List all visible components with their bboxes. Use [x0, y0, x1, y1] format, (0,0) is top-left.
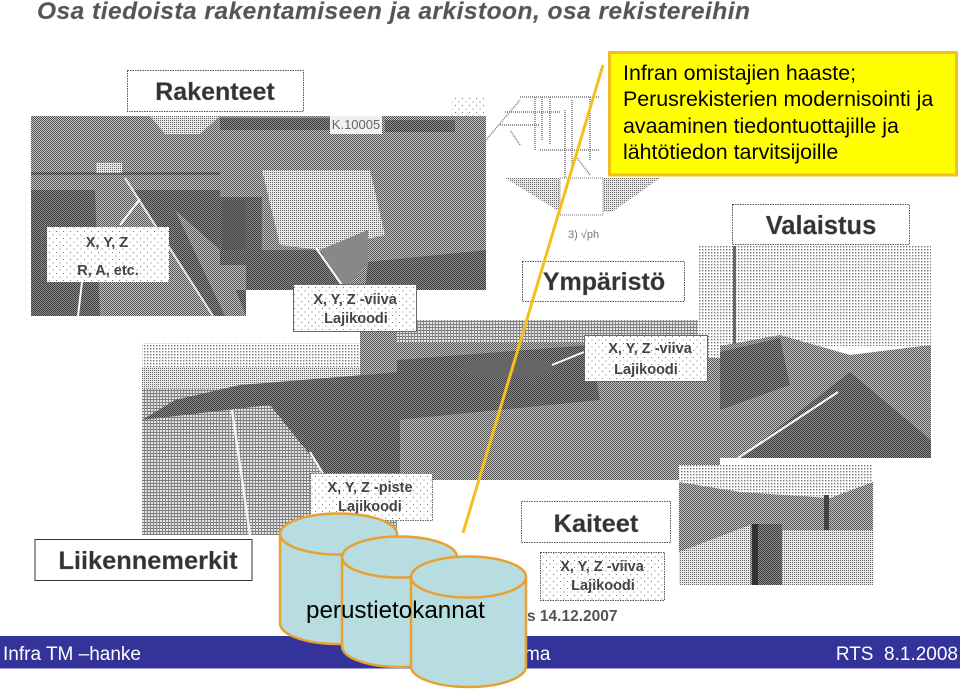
label: X, Y, Z-piste Lajikoodi	[310, 474, 432, 520]
database label: perustietokannat	[306, 597, 485, 624]
footer bar: Infra TM –hanke	[3, 644, 141, 665]
label: X, Y, Z-viiva Lajikoodi environment: X, Y, Z -viiva	[608, 341, 693, 357]
footer bar	[0, 636, 960, 668]
label: Rakenteet: Rakenteet	[155, 78, 275, 106]
label: X, Y, Z-viiva Lajikoodi	[294, 284, 416, 332]
callout: Perusrekisterien modernisointi ja	[623, 87, 933, 111]
label: X, Y, Z-viiva Lajikoodi environment	[584, 336, 708, 382]
callout	[610, 52, 956, 175]
label: X, Y, Z-viiva Lajikoodi guardrail	[540, 552, 664, 600]
callout: Infran omistajien haaste;	[623, 61, 856, 85]
connector line	[463, 65, 603, 533]
label: X, Y, Z-viiva Lajikoodi environment: Lajikoodi	[614, 362, 678, 378]
label: Rakenteet	[128, 70, 304, 112]
database cylinder 2	[342, 536, 457, 667]
photo: guardrail	[679, 465, 873, 585]
database cylinder 3	[411, 556, 526, 687]
label: X, Y, Z-viiva Lajikoodi: Lajikoodi	[324, 311, 388, 327]
drawing: road cross-section: 3) √ph	[568, 229, 599, 241]
label: X, Y, Z-viiva Lajikoodi guardrail: X, Y, Z -viiva	[560, 559, 645, 575]
label: Liikennemerkit	[35, 540, 252, 580]
database cylinder 1	[280, 514, 397, 644]
label: Valaistus	[732, 204, 910, 244]
photo: bridge structure: K.10005	[332, 117, 380, 132]
label: X, Y, Z-viiva Lajikoodi guardrail: Lajikoodi	[571, 578, 635, 594]
photo: roundabout	[142, 320, 720, 535]
photo: lit motorway	[698, 246, 931, 458]
callout: avaaminen tiedontuottajille ja	[623, 114, 899, 138]
label: X, Y, Z-piste Lajikoodi: Lajikoodi	[338, 499, 402, 515]
label: Ympäristö: Ympäristö	[543, 268, 665, 296]
label: X, Y, Z R, A, etc.: X, Y, Z	[86, 235, 128, 251]
footer bar: ma	[524, 644, 551, 665]
label: X, Y, Z R, A, etc.	[47, 227, 169, 282]
photo: structures road	[31, 116, 246, 316]
label: Kaiteet: Kaiteet	[554, 510, 639, 538]
label: X, Y, Z R, A, etc.: R, A, etc.	[77, 263, 139, 279]
label: Ympäristö	[522, 262, 684, 302]
label: Liikennemerkit: Liikennemerkit	[58, 547, 238, 575]
label: X, Y, Z-viiva Lajikoodi: X, Y, Z -viiva	[313, 292, 398, 308]
label: Kaiteet	[522, 502, 670, 542]
source date: s 14.12.2007	[527, 608, 618, 625]
footer bar: RTS 8.1.2008	[836, 644, 958, 665]
drawing: road cross-section	[452, 96, 660, 241]
label: Valaistus: Valaistus	[766, 212, 876, 240]
label: X, Y, Z-piste Lajikoodi: X, Y, Z -piste	[327, 480, 413, 496]
photo: bridge structure	[220, 116, 486, 290]
callout: lähtötiedon tarvitsijoille	[623, 140, 838, 164]
